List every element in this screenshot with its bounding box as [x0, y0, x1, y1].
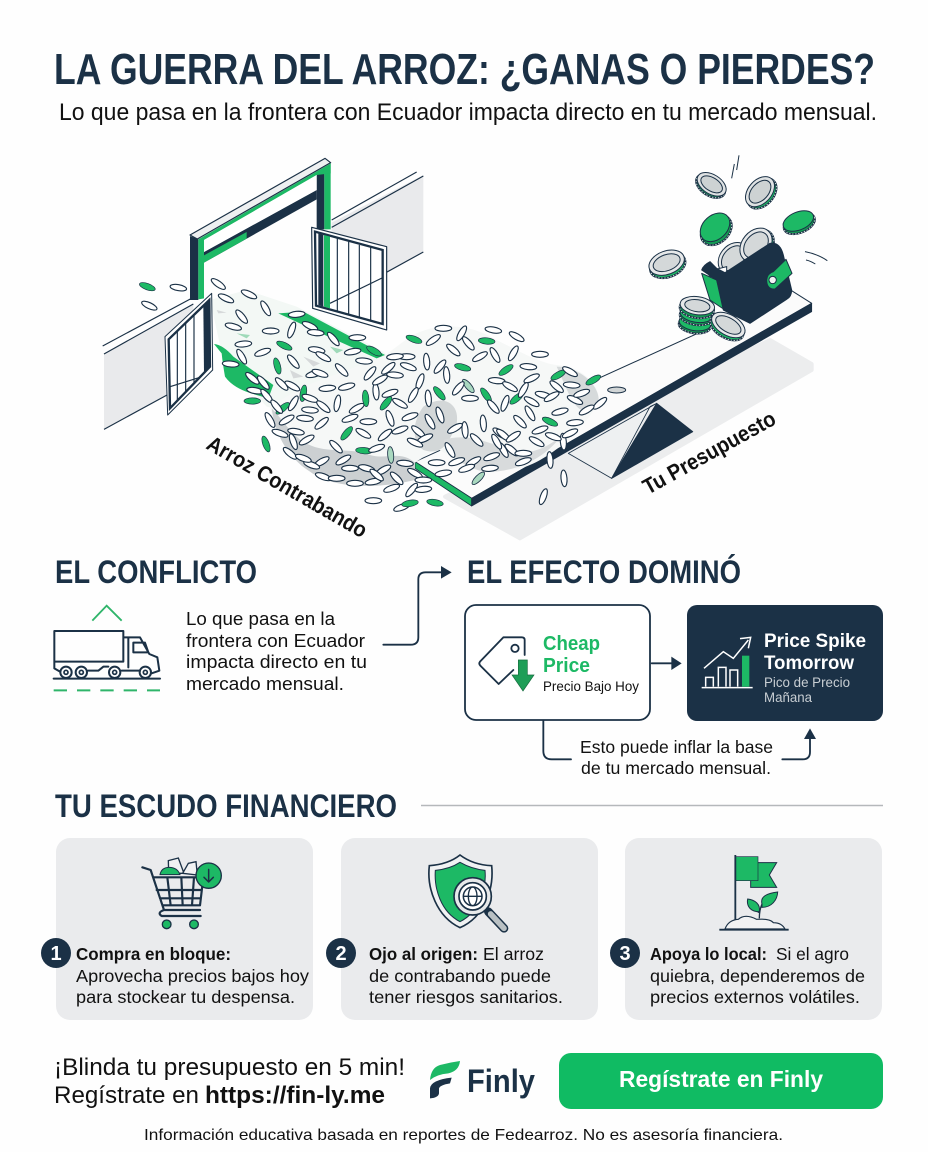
- icon: rising chart: [702, 637, 753, 688]
- text: step 3: Apoya lo local:: [650, 944, 767, 964]
- text: conflict description: [186, 608, 367, 694]
- card: price spike: [687, 605, 883, 721]
- left gate door: [165, 293, 213, 415]
- text: step 3: [650, 944, 865, 1007]
- text: step 2: Ojo al origen:: [369, 944, 478, 964]
- wallet: [702, 243, 792, 323]
- text: step 3: Si el agro: [776, 944, 849, 964]
- footer call to action text: https://fin-ly.me: [205, 1082, 385, 1109]
- text: step 1: [76, 944, 309, 1007]
- coins in the air: [645, 155, 827, 283]
- text: step 3: quiebra, dependeremos de: [650, 966, 865, 986]
- right gate door: [312, 227, 387, 330]
- icon: truck: [54, 606, 160, 690]
- text: step 2: de contrabando puede: [369, 966, 551, 986]
- subtitle: Lo que pasa en la frontera con Ecuador impacta directo en tu mercado mensual.: [59, 99, 877, 126]
- gate frame: [190, 158, 331, 300]
- text: inflation note: [580, 737, 773, 778]
- card: cheap price: [465, 605, 650, 720]
- button: register: [559, 1053, 883, 1109]
- rice stream: [210, 290, 392, 410]
- illustration: rice smuggling scale: [103, 155, 827, 538]
- label: Tu Presupuesto: Tu Presupuesto: [638, 406, 780, 499]
- icon: flag and sprout: [719, 855, 789, 930]
- text: step 1: para stockear tu despensa.: [76, 987, 295, 1007]
- panel: el efecto domino: [465, 554, 883, 778]
- badge: 3: [610, 938, 640, 968]
- heading: el efecto domino: EL EFECTO DOMINÓ: [467, 554, 741, 590]
- text: step 2: [369, 944, 563, 1007]
- card: price spike: Price Spike: [764, 630, 866, 652]
- floor shadow: [445, 340, 812, 538]
- rice pile: [270, 326, 599, 486]
- text: conflict description: mercado mensual.: [186, 673, 344, 694]
- card: price spike: Mañana: [764, 689, 812, 705]
- card: price spike: Pico de Precio: [764, 674, 850, 690]
- coin stack: [678, 294, 749, 346]
- text: conflict description: frontera con Ecuador: [186, 630, 365, 651]
- card: cheap price: Price: [543, 655, 590, 677]
- text: step 3: precios externos volátiles.: [650, 987, 860, 1007]
- badge: 1: [41, 938, 71, 968]
- fulcrum: [568, 403, 693, 478]
- panel: step 2: [326, 838, 598, 1020]
- back wall: [330, 172, 423, 303]
- footer call to action text: [54, 1054, 405, 1109]
- seesaw board: [415, 291, 812, 506]
- left wall: [103, 297, 193, 429]
- disclaimer: Información educativa basada en reportes de Fedearroz. No es asesoría financiera.: [144, 1127, 783, 1144]
- card: cheap price: Precio Bajo Hoy: [543, 678, 639, 694]
- footer call to action text: ¡Blinda tu presupuesto en 5 min!: [54, 1054, 405, 1081]
- text: step 2: tener riesgos sanitarios.: [369, 987, 563, 1007]
- text: inflation note: Esto puede inflar la base: [580, 737, 773, 757]
- panel: step 3: [610, 838, 882, 1020]
- arrow: conflict to domino: [383, 566, 452, 645]
- rice grains: [138, 277, 626, 513]
- badge: 2: [326, 938, 356, 968]
- icon: shield magnifier: [429, 855, 504, 928]
- panel: step 1: [41, 838, 313, 1020]
- text: conflict description: impacta directo en tu: [186, 651, 367, 672]
- text: step 2: El arroz: [483, 944, 544, 964]
- text: step 1: Compra en bloque:: [76, 944, 231, 964]
- text: step 1: Aprovecha precios bajos hoy: [76, 966, 309, 986]
- heading: el conflicto: EL CONFLICTO: [55, 554, 257, 590]
- connector: card to card: [543, 721, 816, 759]
- panel: el conflicto: [54, 554, 367, 694]
- text: conflict description: Lo que pasa en la: [186, 608, 336, 629]
- badge: 3: 3: [619, 943, 631, 965]
- badge: 1: 1: [50, 943, 62, 965]
- label: Arroz Contrabando: Arroz Contrabando: [202, 431, 372, 543]
- badge: 2: 2: [335, 943, 347, 965]
- icon: price tag down: [479, 637, 534, 691]
- footer call to action text: Regístrate en: [54, 1082, 199, 1109]
- logo: Finly: Finly: [467, 1063, 535, 1099]
- heading: tu escudo financiero: TU ESCUDO FINANCIERO: [55, 788, 397, 824]
- arrow: cheap to spike: [652, 657, 682, 670]
- text: inflation note: de tu mercado mensual.: [581, 758, 771, 778]
- card: cheap price: Cheap: [543, 633, 600, 655]
- card: price spike: Tomorrow: [764, 652, 855, 674]
- logo: Finly: [430, 1061, 535, 1099]
- icon: shopping cart: [142, 858, 221, 929]
- button: register: Regístrate en Finly: [619, 1066, 823, 1092]
